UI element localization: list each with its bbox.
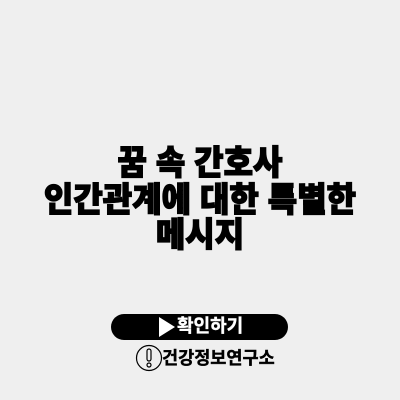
icon: play triangle — [159, 317, 175, 337]
button: confirm — [111, 314, 288, 340]
brand name: 건강정보연구소 — [162, 348, 275, 368]
title: 메시지 — [156, 216, 244, 254]
icon: exclamation circle — [136, 344, 162, 372]
title: 인간관계에 대한 특별한 — [44, 181, 356, 219]
title: 꿈 속 간호사 — [118, 144, 282, 182]
title — [44, 144, 356, 254]
button label: 확인하기 — [177, 316, 243, 336]
